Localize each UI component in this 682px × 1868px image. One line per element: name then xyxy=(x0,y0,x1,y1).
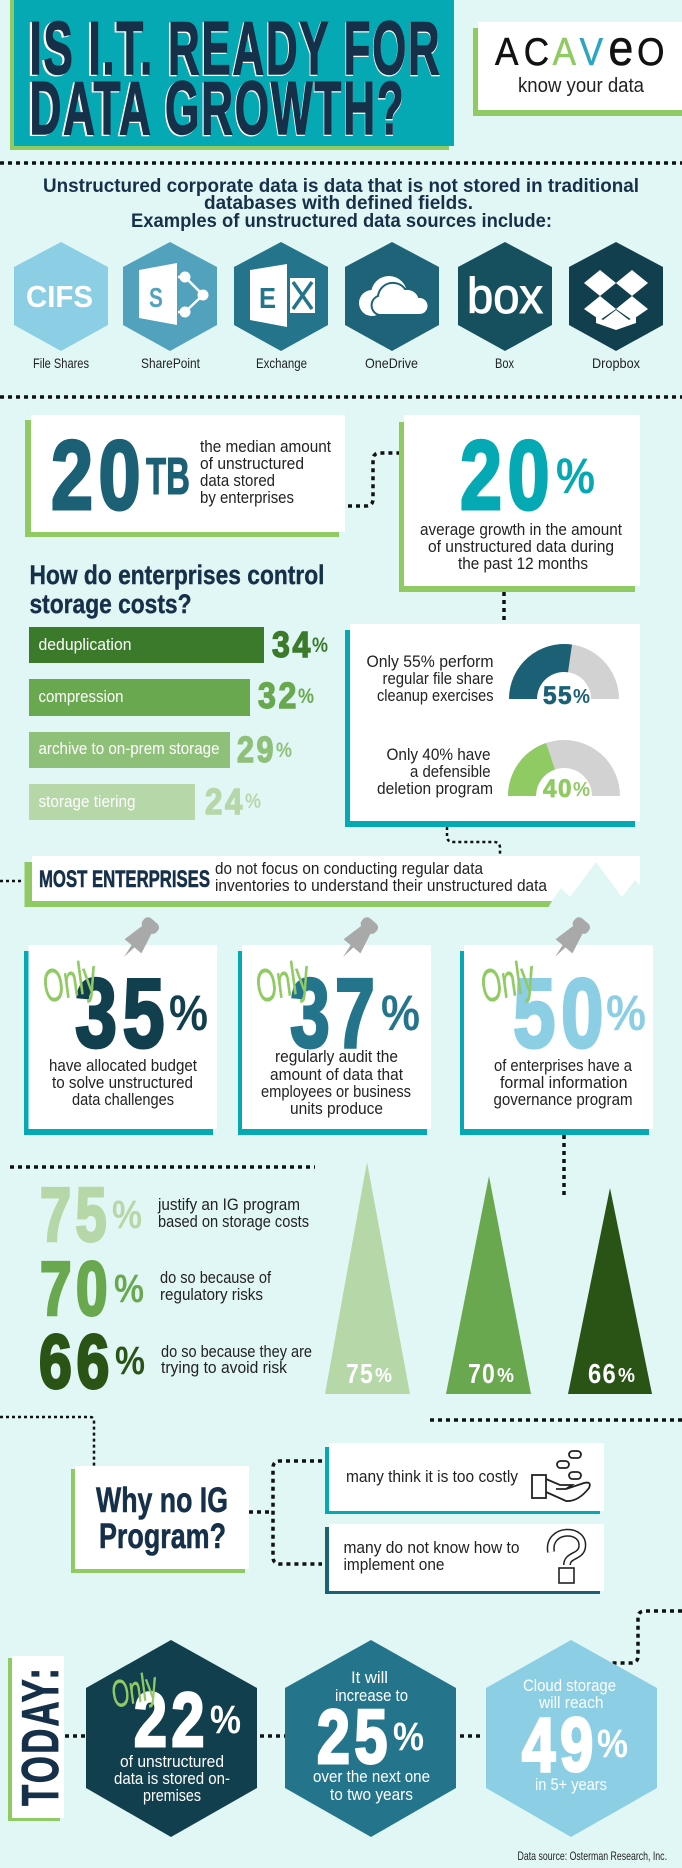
stat: 70%: regulatory risks xyxy=(160,1285,263,1304)
stat: 20TB xyxy=(25,415,345,537)
card: 50% governance xyxy=(460,945,653,1135)
card: 37% audit: 37 xyxy=(290,958,380,1068)
stat: 66%: trying to avoid risk xyxy=(161,1358,287,1377)
icon: hand with coins xyxy=(532,1451,590,1501)
gauge text: 40%: deletion program xyxy=(377,779,493,798)
connector left of banner xyxy=(0,880,22,882)
stat: 66% xyxy=(39,1320,312,1405)
source: Dropbox: Dropbox xyxy=(592,355,640,371)
hexagon: 22% on premises: % xyxy=(210,1698,241,1742)
source: Box: Box xyxy=(495,355,514,371)
title banner xyxy=(10,0,454,151)
card: 35% budget: data challenges xyxy=(72,1090,174,1109)
hexagon: 25% in two years xyxy=(285,1640,456,1837)
stat: 70%: 70 xyxy=(40,1247,112,1332)
triangle chart: 75%: % xyxy=(375,1365,392,1387)
stat: 75%: justify an IG program xyxy=(157,1195,300,1214)
gauge text: 55%: cleanup exercises xyxy=(377,686,494,705)
card: 35% budget xyxy=(24,945,217,1135)
stat: 20TB: TB xyxy=(146,448,190,506)
triangle chart: 75%: 75 xyxy=(346,1358,374,1389)
stat: 75%: % xyxy=(112,1193,142,1237)
gauge: 40%: % xyxy=(573,779,590,801)
heading card: Why no IG Program xyxy=(71,1466,249,1573)
triangle chart: 75% xyxy=(325,1162,410,1394)
logo wordmark: O xyxy=(637,29,665,73)
hexagon: 22% on premises xyxy=(86,1640,257,1837)
reason card: too costly xyxy=(325,1443,604,1514)
hexagon: 22% on premises: 22 xyxy=(134,1678,209,1763)
stat: 20TB: data stored xyxy=(200,471,275,490)
stat: 75%: 75 xyxy=(40,1173,111,1258)
source: SharePoint xyxy=(123,242,217,371)
hexagon: 25% in two years: to two years xyxy=(330,1785,413,1804)
stat: 66%: 66 xyxy=(39,1320,114,1405)
hexagon: 25% in two years: 25 xyxy=(317,1695,392,1780)
source: Exchange: Exchange xyxy=(256,355,307,371)
connector 20TB to 20% xyxy=(348,453,399,506)
stat: 20% xyxy=(399,415,640,592)
stat: 20TB: the median amount xyxy=(200,437,331,456)
hexagon: 49% cloud: will reach xyxy=(538,1693,604,1712)
logo wordmark: A xyxy=(553,29,576,73)
gauge: 40% xyxy=(508,740,620,803)
bar: storage tiering 24%: % xyxy=(245,790,261,813)
card: 37% audit: Only xyxy=(250,949,316,1013)
stat: 20%: % xyxy=(556,448,595,504)
source: OneDrive xyxy=(345,242,439,371)
hexagon: 25% in two years: % xyxy=(393,1715,424,1759)
hexagon: 25% in two years: over the next one xyxy=(313,1767,430,1786)
stat: 66%: do so because they are xyxy=(161,1342,312,1361)
stat: 20%: average growth in the amount xyxy=(420,520,622,539)
bar: compression 32%: % xyxy=(298,685,314,708)
source: File Shares xyxy=(14,242,108,371)
card: 50% governance: 50 xyxy=(513,958,609,1068)
icon: question mark xyxy=(551,1533,582,1583)
stat: 20%: the past 12 months xyxy=(458,554,588,573)
gauge text: 40%: Only 40% have xyxy=(386,745,490,764)
triangle chart: 70% xyxy=(446,1176,531,1394)
triangle chart: 66%: % xyxy=(618,1365,635,1387)
gauge text: 55%: Only 55% perform xyxy=(366,652,494,671)
card: 50% governance: % xyxy=(606,985,646,1041)
logo tagline: know your data xyxy=(518,75,645,97)
bar: deduplication 34%: deduplication xyxy=(38,635,132,654)
source: OneDrive: OneDrive xyxy=(365,355,418,371)
bar: archive 29%: % xyxy=(276,739,292,762)
gauge text: 40%: a defensible xyxy=(410,762,490,781)
logo wordmark: A xyxy=(495,29,519,73)
banner: most enterprises: do not focus on conducting regular data xyxy=(215,859,483,878)
icon: pushpin 3 xyxy=(547,914,594,964)
card: 35% budget: 35 xyxy=(75,958,170,1068)
source: Exchange xyxy=(234,242,328,371)
heading: storage costs xyxy=(30,560,324,619)
bar: archive 29% xyxy=(29,729,292,770)
gauge: 55%: % xyxy=(573,686,590,708)
hexagon: 22% on premises: data is stored on- xyxy=(114,1769,230,1788)
intro text xyxy=(43,176,639,232)
stat: 75% xyxy=(40,1173,309,1258)
gauge: 55%: 55 xyxy=(543,682,573,710)
stat: 20TB: of unstructured xyxy=(200,454,304,473)
card: 50% governance: governance program xyxy=(494,1090,632,1109)
logo wordmark: V xyxy=(580,29,603,73)
panel: cleanup and deletion gauges xyxy=(345,624,640,827)
hexagon: 22% on premises: premises xyxy=(143,1786,201,1805)
card: 37% audit: units produce xyxy=(290,1099,383,1118)
gauge text: 55%: regular file share xyxy=(382,669,494,688)
stat: 20TB: by enterprises xyxy=(200,488,294,507)
reason card: how to implement: implement one xyxy=(344,1555,444,1574)
source: Dropbox xyxy=(569,242,663,371)
source: Exchange: E xyxy=(259,283,276,315)
card: 35% budget: % xyxy=(169,985,208,1041)
stat: 70%: % xyxy=(114,1267,144,1311)
source: Box xyxy=(458,242,552,371)
card: 35% budget: to solve unstructured xyxy=(52,1073,193,1092)
stat: 75%: based on storage costs xyxy=(158,1212,309,1231)
triangle chart: 66%: 66 xyxy=(588,1358,617,1389)
heading: storage costs: storage costs? xyxy=(30,589,192,619)
connector panel to banner xyxy=(447,827,500,855)
source: Box: box xyxy=(467,268,543,324)
card: 37% audit xyxy=(238,945,431,1135)
bar: deduplication 34%: % xyxy=(312,634,328,657)
icon: pushpin 2 xyxy=(335,914,382,964)
connector why-no-IG to reasons xyxy=(249,1461,322,1564)
gauge: 55% xyxy=(509,644,619,710)
reason card: how to implement xyxy=(325,1524,604,1594)
bar: compression 32%: 32 xyxy=(258,675,299,716)
stat: 20%: 20 xyxy=(460,420,555,530)
card: 37% audit: regularly audit the xyxy=(275,1047,398,1066)
bar: storage tiering 24%: 24 xyxy=(205,781,245,822)
logo wordmark: e xyxy=(608,21,633,77)
gauge text: 55% xyxy=(366,652,494,705)
hexagon: 25% in two years: It will xyxy=(351,1668,388,1687)
bar chart: storage cost control xyxy=(29,624,328,822)
hexagon: 22% on premises: of unstructured xyxy=(120,1752,224,1771)
triangle chart: 70%: 70 xyxy=(468,1358,496,1389)
hexagon: 49% cloud: % xyxy=(597,1722,628,1766)
heading card: Why no IG Program: Program? xyxy=(99,1517,226,1556)
triangle chart: 66% xyxy=(568,1188,652,1394)
logo wordmark: C xyxy=(524,29,549,73)
bar: compression 32% xyxy=(29,675,314,716)
stat: 70%: do so because of xyxy=(160,1268,271,1287)
stat: 66%: % xyxy=(115,1339,145,1383)
logo card xyxy=(473,21,682,116)
intro text: Examples of unstructured data sources include: xyxy=(131,211,552,232)
card: 37% audit: employees or business xyxy=(261,1082,411,1101)
card: 35% budget: have allocated budget xyxy=(49,1056,197,1075)
card: 50% governance: Only xyxy=(475,949,541,1013)
bar: deduplication 34% xyxy=(29,624,328,665)
bar: storage tiering 24% xyxy=(29,781,261,822)
reason card: how to implement: many do not know how to xyxy=(344,1538,520,1557)
title banner: DATA GROWTH? xyxy=(30,66,406,150)
heading: storage costs: How do enterprises control xyxy=(30,560,324,590)
bar: archive 29%: archive to on-prem storage xyxy=(38,739,220,758)
reason card: too costly: many think it is too costly xyxy=(346,1467,518,1486)
hexagon: 49% cloud xyxy=(486,1640,657,1837)
bar: storage tiering 24%: storage tiering xyxy=(38,792,136,811)
banner: most enterprises xyxy=(24,856,640,908)
stat: 20TB: 20 xyxy=(51,420,146,530)
gauge text: 40% xyxy=(377,745,493,798)
gauge: 40%: 40 xyxy=(543,775,573,803)
banner: most enterprises: MOST ENTERPRISES xyxy=(39,866,210,893)
hexagon: 49% cloud: Cloud storage xyxy=(523,1676,616,1695)
icon: pushpin 1 xyxy=(116,914,163,964)
hexagon: 49% cloud: in 5+ years xyxy=(535,1775,607,1794)
source: File Shares: CIFS xyxy=(26,279,93,314)
card: 50% governance: formal information xyxy=(500,1073,628,1092)
source: SharePoint: SharePoint xyxy=(141,355,200,371)
card: 50% governance: of enterprises have a xyxy=(494,1056,632,1075)
today label xyxy=(8,1656,70,1821)
card: 37% audit: amount of data that xyxy=(270,1065,403,1084)
card: 37% audit: % xyxy=(381,985,420,1041)
bar: archive 29%: 29 xyxy=(237,729,276,770)
source: SharePoint: S xyxy=(149,282,164,313)
title banner: DATA GROWTH? xyxy=(28,67,406,151)
intro text: Unstructured corporate data is data that is not stored in traditional xyxy=(43,176,639,197)
today label: TODAY: xyxy=(12,1666,70,1806)
intro text: databases with defined fields. xyxy=(204,193,473,214)
stat: 20%: of unstructured data during xyxy=(428,537,614,556)
source: File Shares: File Shares xyxy=(33,355,89,371)
card: 35% budget: Only xyxy=(37,949,103,1013)
heading card: Why no IG Program: Why no IG xyxy=(96,1481,228,1520)
hexagon: 25% in two years: increase to xyxy=(335,1686,408,1705)
banner: most enterprises: inventories to understand their unstructured data xyxy=(215,876,547,895)
bar: deduplication 34%: 34 xyxy=(272,624,313,665)
stat: 70% xyxy=(40,1247,271,1332)
hexagon: 22% on premises: Only xyxy=(107,1665,163,1717)
triangle chart: 70%: % xyxy=(497,1365,514,1387)
hexagon: 49% cloud: 49 xyxy=(522,1703,598,1788)
bar: compression 32%: compression xyxy=(38,687,124,706)
